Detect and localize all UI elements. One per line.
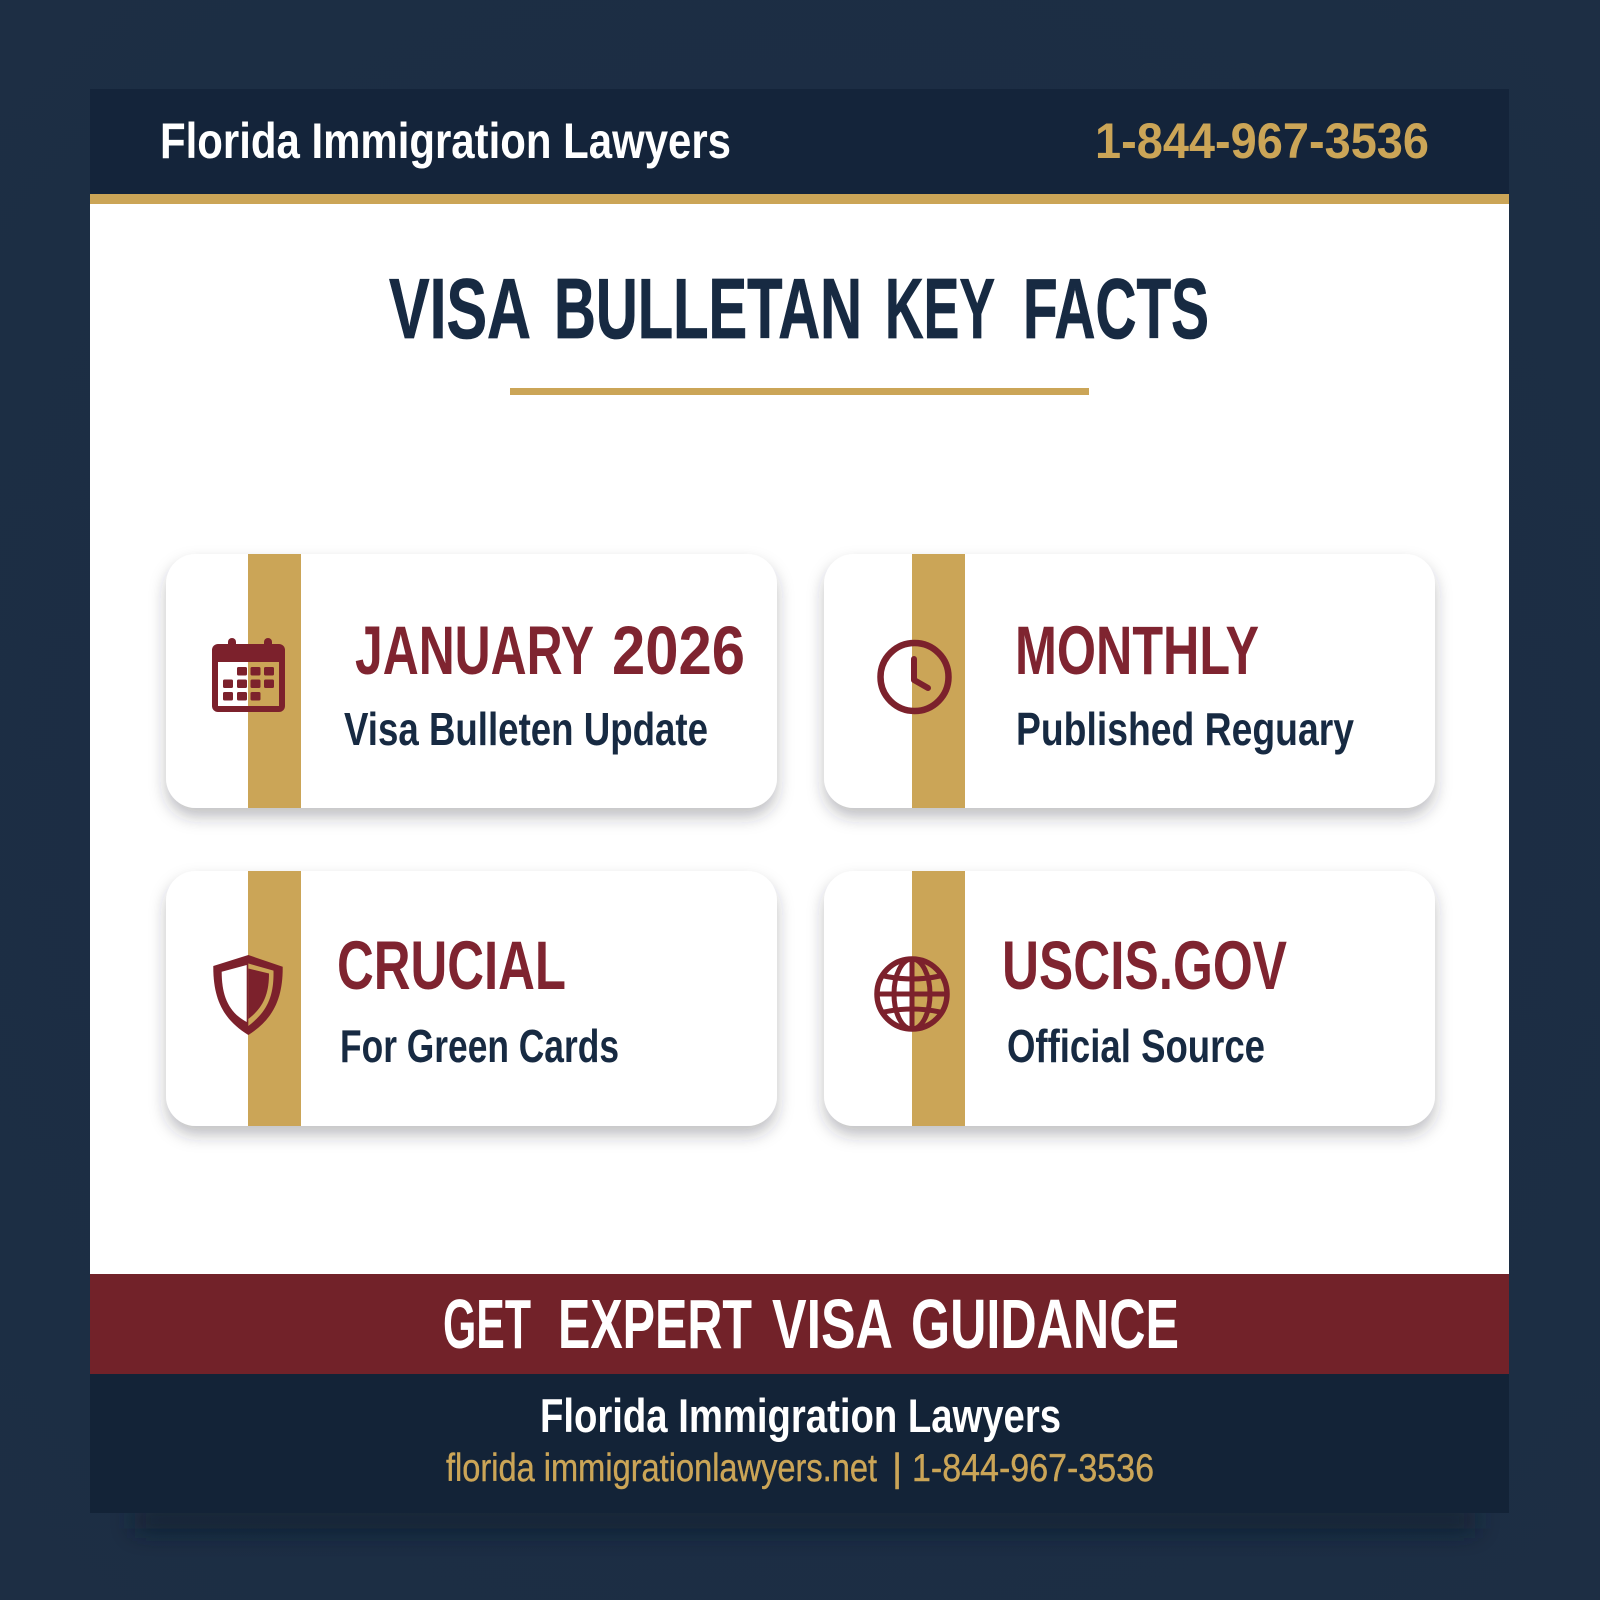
header firm name: Florida Immigration Lawyers xyxy=(160,113,731,169)
title: FACTS xyxy=(1023,262,1209,357)
card: Crucial xyxy=(166,871,777,1126)
card subtext: Published Reguary xyxy=(1016,703,1354,755)
footer xyxy=(90,1374,1509,1513)
banner text xyxy=(443,1285,1179,1363)
icon: shield xyxy=(213,955,283,1035)
card: USCIS.GOV xyxy=(824,871,1435,1126)
banner text: GET xyxy=(443,1285,531,1363)
card: Monthly xyxy=(824,554,1435,808)
title: VISA xyxy=(389,262,531,357)
panel base shadow xyxy=(135,1510,1475,1530)
icon: globe xyxy=(877,959,947,1029)
card heading: JANUARY xyxy=(355,612,594,689)
card subtext: Visa Bulleten Update xyxy=(344,703,708,755)
card heading: MONTHLY xyxy=(1015,612,1259,689)
banner text: EXPERT xyxy=(558,1285,752,1363)
icon: clock xyxy=(880,643,948,711)
footer contact line: florida immigrationlawyers.net xyxy=(446,1447,877,1490)
title: KEY xyxy=(885,262,995,357)
icon: calendar xyxy=(212,638,285,712)
card heading: CRUCIAL xyxy=(337,927,566,1004)
footer contact line: 1-844-967-3536 xyxy=(912,1447,1154,1490)
card heading: 2026 xyxy=(612,612,745,689)
header phone number: 1-844-967-3536 xyxy=(1095,113,1429,169)
card heading: USCIS.GOV xyxy=(1002,927,1287,1004)
card: January 2026 xyxy=(166,554,777,808)
title: BULLETAN xyxy=(554,262,862,357)
card subtext: Official Source xyxy=(1007,1020,1265,1072)
banner text: GUIDANCE xyxy=(911,1285,1179,1363)
main panel xyxy=(90,89,1509,1513)
header gold rule xyxy=(90,194,1509,204)
title xyxy=(389,262,1209,357)
footer contact line: | xyxy=(892,1447,902,1490)
title underline xyxy=(510,388,1089,395)
footer firm name: Florida Immigration Lawyers xyxy=(540,1389,1061,1442)
header bar xyxy=(90,89,1509,194)
call-to-action banner xyxy=(90,1274,1509,1374)
card subtext: For Green Cards xyxy=(340,1020,619,1072)
banner text: VISA xyxy=(772,1285,893,1363)
